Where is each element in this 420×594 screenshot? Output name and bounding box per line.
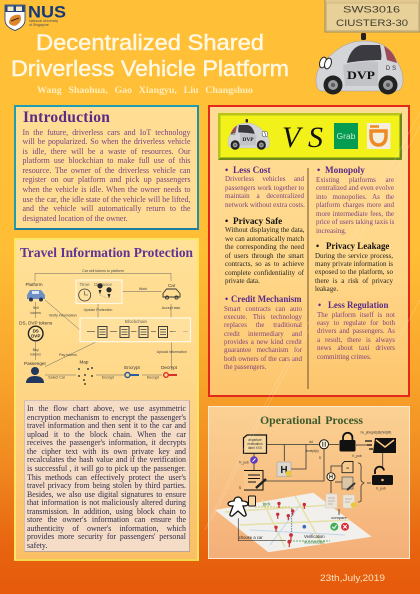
icon: hash box	[277, 462, 292, 477]
text: introduction body: use the car, the idle state of the vehicle will be lifted,	[22, 195, 190, 204]
text: introduction body: will be popularized. So when the driverless vehicle	[22, 137, 190, 146]
block: less cost: •	[225, 165, 228, 175]
text: privacy safe body: Without displaying the data,	[225, 226, 305, 234]
text: privacy safe body	[225, 226, 305, 285]
time and distance box	[76, 280, 122, 304]
text: monopoly body: Existing platforms are	[316, 176, 394, 184]
block: less regulation: •	[318, 300, 321, 310]
text: privacy leakage body: many private information is	[315, 260, 393, 268]
flow chart: travel information: Pay tokens	[59, 353, 77, 357]
flow chart: travel information: Encrypt	[124, 365, 141, 370]
text: flow chart explanation: that information is not maliciously altered during	[27, 498, 186, 507]
banner: DVP versus Grab and Didi	[218, 113, 402, 160]
text: credit mechanism body: credit intermediary and	[224, 330, 302, 338]
heading: operational process: Operational Process	[260, 413, 363, 427]
text: privacy safe body: contracts, so as to achieve	[225, 260, 304, 268]
diagram: operational process: S	[319, 456, 321, 460]
icon: gingerbread user	[228, 496, 256, 516]
text: monopoly body: price of users taking taxis is	[316, 218, 394, 226]
icon: hash circle: H	[329, 475, 333, 481]
icon: private key	[239, 456, 258, 464]
icon: DS DVP coin: DS	[33, 328, 39, 334]
text: flow chart explanation: authenticity of owner's information, which	[27, 524, 186, 533]
text: less regulation body: The platform itself is not	[317, 310, 395, 318]
icon: document: label XXX	[248, 446, 263, 450]
flow chart: travel information: Update Protection	[84, 308, 112, 312]
text: less regulation body: easy to regulate for both	[317, 319, 395, 327]
diagram: operational process: receipt(s)	[305, 449, 319, 453]
icon: document	[244, 435, 266, 453]
heading: introduction: Introduction	[23, 109, 110, 126]
labels on map	[239, 502, 325, 544]
flow chart: travel information: Sell	[33, 306, 39, 310]
icon: received documents: dd	[346, 466, 349, 470]
text: privacy leakage body	[315, 252, 393, 293]
icon: decrypt key	[164, 373, 177, 377]
icon: open lock	[372, 467, 393, 485]
map	[215, 493, 372, 552]
heading: less cost: Less Cost	[233, 165, 271, 175]
labels on map: pick	[263, 502, 271, 506]
block: credit mechanism: •	[225, 294, 228, 304]
VS lettering: V S	[282, 121, 323, 154]
icon: document: destination	[247, 442, 263, 446]
icon: map pins	[78, 367, 93, 385]
logo: NUS: National University	[29, 19, 58, 23]
icon: platform car	[27, 290, 45, 302]
flow chart: travel information: Verify information	[49, 314, 77, 318]
flow chart: travel information: Map	[80, 360, 89, 364]
text: credit mechanism body: guarantee mechanism for	[224, 346, 302, 354]
icon: DVP self-driving car	[316, 33, 404, 94]
text: introduction body: when the vehicle is idle. When the owner needs to	[22, 185, 190, 194]
labels on map: succeeded	[304, 540, 325, 544]
text: introduction body	[22, 128, 190, 223]
text: introduction body: is idle, there will be a waste of resources. Our	[22, 147, 190, 156]
text: flow chart explanation: store the owner's information can ensure the	[27, 515, 186, 524]
icon: received documents	[342, 462, 355, 490]
text: less regulation body	[317, 310, 395, 361]
text: introduction body: platform use blockchian to make full use of this	[22, 156, 190, 165]
flow chart: travel information: Platform	[25, 282, 43, 287]
logo: NUS: NUS	[28, 2, 66, 22]
flow chart: travel information: Decrypt	[147, 376, 159, 380]
flow chart: travel information: Upload information	[157, 350, 187, 354]
badge: course code: SWS3016	[343, 4, 400, 14]
text: credit mechanism body	[224, 304, 302, 371]
text: flow chart explanation: the cipher text with its own private key and	[27, 447, 186, 456]
flow chart: travel information: Car	[168, 283, 176, 288]
icon: DVP self-driving car: DS	[386, 66, 398, 72]
heading: credit mechanism: Credit Mechanism	[231, 294, 302, 304]
text: flow chart explanation: travel information and then sent it to the car and	[27, 421, 186, 430]
routes on map	[238, 507, 330, 541]
block: credit mechanism	[224, 294, 302, 371]
text: introduction body: register on our platform and pick up passengers	[22, 175, 190, 184]
logo: Didi	[367, 123, 390, 149]
icon: car outline	[163, 289, 180, 299]
blockchain box	[80, 318, 190, 342]
logo: NUS: of Singapore	[29, 23, 49, 27]
icon: private key: R_pub	[239, 460, 249, 464]
flow chart: travel information: tokens	[30, 352, 41, 356]
icon: DS DVP coin: DVP	[31, 334, 40, 338]
icon: encrypt key	[125, 372, 139, 378]
flow chart: travel information: Buy	[33, 348, 39, 352]
heading: privacy leakage: Privacy Leakage	[326, 241, 389, 251]
text: flow chart explanation: is successful , it will go to pick up the passenger.	[27, 464, 186, 473]
text: credit mechanism body: execute. This technology	[224, 313, 302, 321]
flow chart: travel information: tokens	[30, 311, 41, 315]
text: less cost body: passengers work together to	[225, 184, 304, 192]
title: Driverless Vehicle Platform	[11, 56, 289, 81]
badge: course code: CIUSTER3-30	[336, 18, 408, 28]
diagram: operational process: hv_pbk(pid)@(hid)(R)	[361, 430, 391, 434]
map pins	[274, 502, 306, 547]
date: 23th,July,2019	[320, 573, 385, 584]
text: credit mechanism body: provides a new kind credit	[224, 338, 302, 346]
diagram: operational process	[215, 430, 396, 552]
text: flow chart explanation: upload it to the block chain. When the car	[27, 430, 186, 439]
icon: signature: S	[239, 486, 242, 490]
icon: passenger	[26, 367, 44, 383]
text: less regulation body: news about taxi drivers	[317, 344, 395, 352]
text: monopoly body: increasing.	[316, 227, 347, 235]
text: less regulation body: a result, there is always	[317, 336, 395, 344]
divider	[308, 168, 309, 389]
text: less regulation body: drivers and passengers. As	[317, 327, 395, 335]
panel: introduction	[14, 105, 199, 230]
block: privacy leakage: •	[316, 241, 319, 251]
flow chart: travel information	[19, 269, 192, 385]
icon: compared documents	[326, 494, 356, 508]
labels on map: Verification	[304, 534, 325, 539]
text: privacy leakage body: leakage.	[315, 285, 338, 293]
text: monopoly body	[316, 176, 394, 235]
text: introduction body: and the vehicle will automatically return to the	[22, 204, 190, 213]
icon: document: departure	[248, 438, 262, 442]
logo: Grab: Grab	[337, 131, 356, 141]
flow chart: travel information: Select Car	[48, 376, 66, 380]
text: privacy safe body: the corresponding the need	[225, 243, 304, 251]
label: compare: compare	[331, 515, 348, 520]
diagram: operational process: K_pub	[376, 486, 386, 490]
text: privacy safe body: of users through the smart	[225, 252, 304, 260]
title: Decentralized Shared	[36, 30, 264, 55]
text: credit mechanism body: replaces the traditional	[224, 321, 302, 329]
icon: check and cross	[330, 523, 349, 531]
icon: small DVP car	[228, 119, 269, 150]
logo: Grab	[334, 123, 358, 149]
text: introduction body: resource. The owner of the driverless vehicle can	[22, 166, 190, 175]
icon: signature	[239, 470, 266, 490]
logo: NUS	[4, 2, 66, 31]
panel: operational process	[208, 406, 410, 559]
text: introduction body: In the future, driverless cars and IoT technology	[22, 128, 190, 136]
icon: hash circle	[327, 473, 335, 481]
text: credit mechanism body: the passengers.	[224, 363, 266, 371]
text: flow chart explanation: travel privacy from being stolen by third parties.	[27, 481, 186, 490]
icon: small DVP car: DS	[231, 132, 236, 136]
block: privacy leakage	[315, 241, 393, 293]
heading: travel information protection: Travel Information Protection	[20, 245, 193, 260]
diagram: operational process: dd	[309, 440, 313, 444]
authors: Wang Shaohua, Gao Xiangyu, Liu Changshuo	[37, 85, 253, 96]
text: flow chart explanation: In the flow chart above, we use asymmetric	[27, 404, 186, 413]
icon: lock	[340, 433, 356, 452]
flow chart: travel information: Decrypt	[161, 365, 178, 370]
flow chart: travel information: Car sell tokens to platform	[82, 269, 124, 273]
icon: envelope	[365, 438, 396, 453]
text: privacy safe body: private data.	[225, 277, 260, 285]
text: privacy safe body: complete confidentiality of	[225, 268, 304, 276]
text: monopoly body: platform charges more and	[316, 201, 394, 209]
icon: DS DVP coin	[28, 326, 43, 341]
block: monopoly: •	[317, 165, 320, 175]
pin: blue	[302, 525, 306, 528]
text: flow chart explanation: provides more security for passengers' personal	[27, 532, 186, 541]
icon: concatenate	[320, 440, 328, 449]
labels on map: choose a car	[239, 535, 263, 540]
flow chart: travel information: DS, DVP tokens	[19, 320, 53, 326]
heading: monopoly: Monopoly	[325, 165, 365, 175]
flow chart: travel information: Blockchain	[125, 319, 148, 324]
icon: small DVP car: DVP	[242, 137, 254, 143]
text: credit mechanism body: both owners of the cars and	[224, 355, 302, 363]
flow chart: travel information: Accept task	[162, 306, 180, 310]
text: flow chart explanation: receives the passenger's information, it decrypts	[27, 438, 186, 447]
block: monopoly	[316, 165, 394, 235]
panel: travel information protection	[14, 238, 199, 561]
text: flow chart explanation: This methods can effectively protect the user's	[27, 472, 186, 482]
text: flow chart explanation	[27, 404, 186, 550]
text: monopoly body: more intermediate fees, the	[316, 210, 394, 218]
text: privacy safe body: we can automatically match	[225, 234, 304, 242]
diagram: operational process: K_pub	[352, 454, 362, 458]
text: less regulation body: committing crimes.	[317, 353, 371, 361]
block: privacy safe	[225, 216, 305, 285]
flow chart: travel information: Time	[79, 282, 90, 287]
text: credit mechanism body: Smart contracts can auto	[224, 304, 302, 312]
text: flow chart explanation: safety.	[27, 541, 47, 550]
text: introduction body: designated location of the owner.	[22, 214, 128, 223]
block: privacy safe: •	[225, 216, 228, 226]
icon: DVP self-driving car: DVP	[347, 70, 375, 82]
text: privacy leakage body: exposed to the platform, so	[315, 268, 393, 276]
text: less cost body: maintain a decentralized	[225, 192, 304, 200]
flow chart: travel information: Encrypt	[102, 376, 114, 380]
text: less cost body: network without extra costs.	[225, 201, 305, 209]
heading: privacy safe: Privacy Safe	[233, 216, 282, 226]
title	[11, 30, 289, 81]
text: flow chart explanation: transmission. In addition, using block chain to	[27, 507, 186, 516]
block: less cost	[225, 165, 305, 209]
text: flow chart explanation: recalculates the hash value and if the verification	[27, 455, 186, 464]
text: flow chart explanation: Besides, we also use digital signatures to ensure	[27, 490, 186, 499]
text: privacy leakage body: there is a risk of privacy	[315, 277, 393, 285]
flow chart: travel information: Passenger	[24, 361, 46, 366]
block: less regulation	[317, 300, 395, 361]
flow chart: travel information: Work	[139, 287, 147, 291]
text: monopoly body: into monopolies. As the	[316, 193, 394, 201]
text: less cost body: Driverless vehicles and	[225, 175, 304, 183]
text: privacy leakage body: During the service process,	[315, 252, 393, 260]
icon: hash box: H	[280, 465, 288, 476]
flow chart: travel information: Distance	[94, 282, 112, 287]
text: monopoly body: centralized and even evolve	[316, 184, 394, 192]
badge: course code	[324, 0, 420, 32]
heading: less regulation: Less Regulation	[328, 300, 388, 310]
panel: comparison	[208, 105, 410, 397]
text: less cost body	[225, 175, 305, 209]
text: flow chart explanation: encryption mechanism to encrypt the passenger's	[27, 413, 186, 422]
text box: flow chart explanation	[24, 400, 190, 552]
